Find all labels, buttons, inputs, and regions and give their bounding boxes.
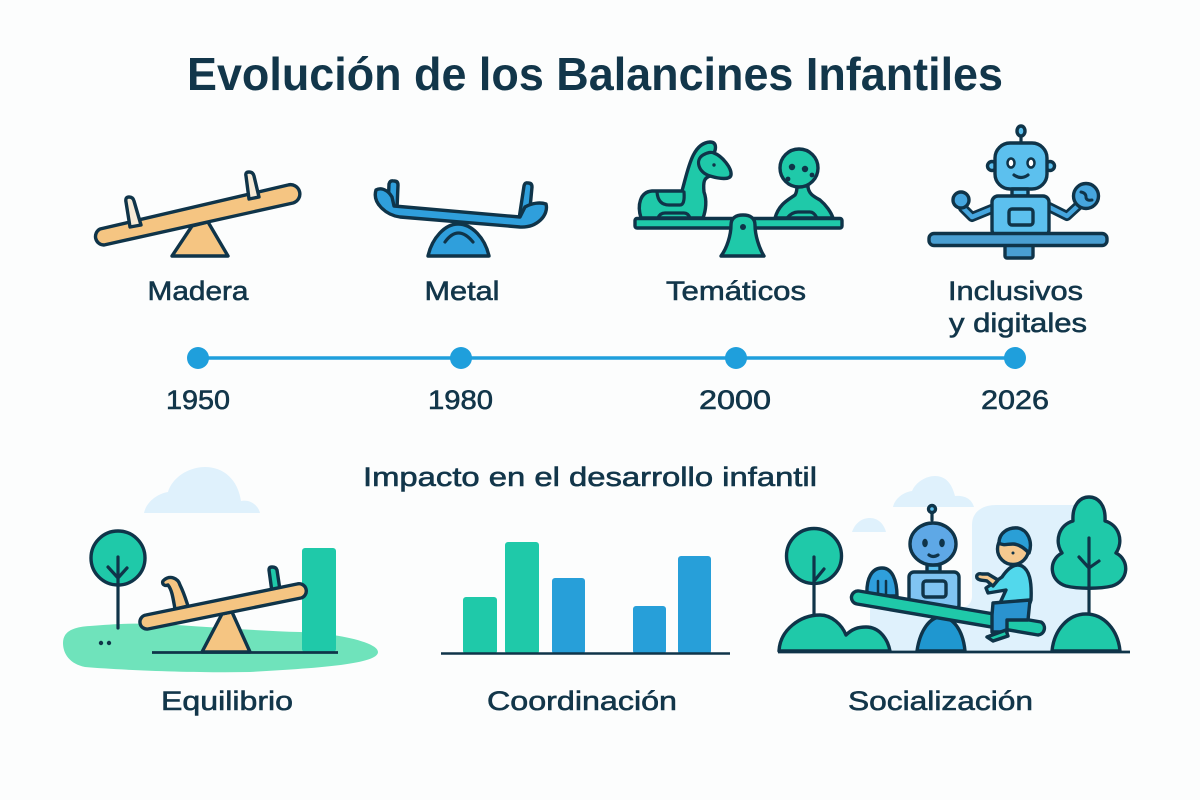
section heading: Impacto en el desarrollo infantil <box>363 462 817 492</box>
bar chart: coordination <box>441 542 730 654</box>
icon: metal seesaw <box>375 181 546 256</box>
timeline <box>166 347 1049 415</box>
timeline: 2000 <box>699 385 771 415</box>
illustration: socialization <box>778 476 1130 652</box>
label: Socialización: Socialización <box>848 686 1033 716</box>
label: Madera: Madera <box>148 276 250 306</box>
icon: wooden seesaw <box>96 172 300 256</box>
title: Evolución de los Balancines Infantiles <box>187 48 1003 100</box>
icon: robot seesaw <box>929 126 1107 258</box>
timeline: 1980 <box>428 385 493 415</box>
label: Equilibrio: Equilibrio <box>161 686 293 716</box>
label: Inclusivos y digitales: y digitales <box>949 308 1087 338</box>
label: Inclusivos y digitales: Inclusivos <box>948 276 1083 306</box>
label: Coordinación: Coordinación <box>487 686 677 716</box>
illustration: balance <box>63 467 378 672</box>
label: Inclusivos y digitales <box>948 276 1087 338</box>
timeline: 2026 <box>981 385 1049 415</box>
label: Temáticos: Temáticos <box>666 276 806 306</box>
timeline: 1950 <box>166 385 230 415</box>
icon: themed seesaw with horse and child <box>635 142 842 256</box>
label: Metal: Metal <box>424 276 500 306</box>
